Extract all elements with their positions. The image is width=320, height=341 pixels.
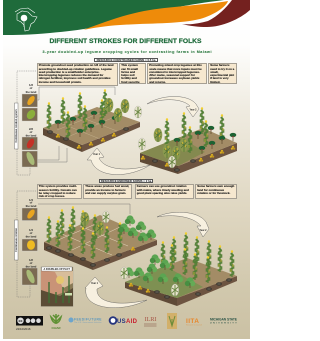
- crops: [165, 118, 169, 145]
- arrow: field 2 to field 1: Year 1: [93, 153, 101, 156]
- heading tag: resource constrained farms: RESOURCE CONSTRAINED FARMS < 0.5 ha: [97, 58, 155, 62]
- infographic artwork: [3, 0, 250, 339]
- vertical label: top: [14, 103, 18, 149]
- logo: creative commons: [16, 316, 43, 326]
- field 1: resource constrained year 1: [43, 89, 142, 152]
- dashed connector: lower rotation: [17, 191, 36, 297]
- land fraction labels: 1/4: [29, 198, 33, 202]
- land fraction labels: of: [30, 261, 32, 265]
- subtitle: 3-year doubled-up legume cropping cycles for contrasting farms in Malawi: [42, 50, 212, 54]
- land fraction labels: 1/2: [29, 258, 33, 262]
- logo: CGIAR: [51, 314, 61, 330]
- logo: ILRI: [144, 316, 156, 327]
- logo: USAID: USAID: [117, 319, 138, 325]
- land fraction labels: of: [30, 86, 32, 90]
- land fraction labels: the land: [26, 234, 37, 238]
- logo: Michigan State University: [210, 318, 238, 324]
- text box: endowed 3: Farmers can use groundnut rotation with maize, where timely weeding and good plant spacing also raise yields.: [137, 184, 189, 195]
- logo: IITA: Research to nourish: [186, 324, 202, 326]
- crop tile: yellow legume lower: [22, 239, 38, 251]
- text box: constrained 2: This system can fit small farms and helps soil fertility and food security.: [121, 63, 140, 84]
- logo: IITA: [186, 318, 202, 326]
- land fraction labels: 1/3: [29, 83, 33, 87]
- text box: endowed 4: Some farmers own enough land for continuous rotation or for livestock.: [197, 184, 234, 195]
- vertical label: top: Continuous rotation system: [15, 109, 18, 143]
- crops: [47, 216, 51, 243]
- arrow: field 2 to field 1: [87, 148, 150, 175]
- connector lines from crop tiles to fields: [37, 87, 130, 214]
- date: 22/10/2016: [16, 327, 31, 331]
- roots: [141, 156, 145, 160]
- arrow: field 3 to field 4: [157, 212, 209, 237]
- crop tile: maize lower: [22, 268, 38, 285]
- roots: [129, 283, 133, 287]
- crop tile: soybean top: [22, 108, 38, 121]
- land fraction labels: [26, 83, 37, 268]
- dashed connector: top rotation: [17, 71, 36, 175]
- text box: constrained 1: Promote groundnut seed production on 1/3 of the land according to doubled-up rotation guidelines. Legume seed production is a smallholder enterprise. Intercropping legumes reduces the demand for nitrogen fertilizer, improves soil health and provides income and household protein.: [39, 63, 114, 84]
- arrow: field 1 to field 2: Year 2: [189, 108, 197, 112]
- text box: constrained 2: [119, 62, 146, 84]
- field 2: resource constrained year 2: [138, 107, 237, 174]
- crops: [161, 241, 165, 268]
- logo: Feed the Future: The U.S. Government Initiative: [74, 321, 102, 324]
- text box: endowed 3: [134, 184, 194, 198]
- crop tile: maize top: [22, 151, 38, 167]
- logo: Michigan State University: MICHIGAN STATE: [210, 318, 238, 322]
- text box: endowed 1: This system provides multi-season fertility. Cereals can be relay cropped to reduce risk of crop losses.: [39, 184, 77, 198]
- text box: endowed 2: These areas produce fuel wood, provide an income to farmers and can supply surplus grain.: [85, 184, 129, 195]
- arrow: field 1 to field 2: [147, 96, 199, 117]
- logo: creative commons: cc: [19, 319, 22, 323]
- land fraction labels: of: [30, 130, 32, 134]
- land fraction labels: the land: [26, 90, 37, 94]
- title: DIFFERENT STROKES FOR DIFFERENT FOLKS: [50, 38, 202, 45]
- vertical label: lower: [14, 220, 18, 260]
- land fraction labels: 1/4: [29, 228, 33, 232]
- text box: constrained 4: Some farmers need to try it on a small, experimental plot if land is very limited.: [210, 63, 234, 84]
- field 3: resource endowed year 1: [44, 206, 157, 270]
- text box: endowed 4: [195, 184, 237, 198]
- header banner: [3, 0, 250, 35]
- arrow: field 4 to field 3: Year 1: [91, 282, 99, 285]
- logo: IITA: IITA: [186, 318, 199, 325]
- logo: ILRI: ILRI: [144, 316, 156, 323]
- crop tile: groundnut top: [22, 94, 38, 107]
- roots: [47, 130, 53, 134]
- vertical label: lower: Continuous rotation: [15, 228, 18, 252]
- land fraction labels: of: [30, 231, 32, 235]
- roots: [46, 246, 52, 250]
- logo: Michigan State University: UNIVERSITY: [210, 322, 237, 324]
- land fraction labels: the land: [26, 204, 37, 208]
- land fraction labels: the land: [26, 134, 37, 138]
- logo: Feed the Future: [68, 318, 102, 324]
- land fraction labels: the land: [26, 264, 37, 268]
- logo: CGIAR: CGIAR: [51, 326, 61, 330]
- text box: constrained 3: Promoting mixed crop legumes at this scale means that more inputs must be considered in intercropped legumes. After maize, seasonal support for groundnut increases soybean yields and returns.: [149, 63, 202, 84]
- logo: USAID: [109, 316, 138, 325]
- heading tag: resource endowed farms: RESOURCE ENDOWED FARMS > 2 ha: [101, 178, 151, 182]
- logo: Bunda college: [167, 313, 177, 329]
- field 4: resource endowed year 2: [120, 232, 237, 306]
- arrow: field 4 to field 3: [85, 277, 147, 308]
- text box: endowed 2: [83, 184, 132, 198]
- inset photo: A DOUBLED-UP PLOT: [44, 268, 70, 271]
- land fraction labels: 2/3: [29, 127, 33, 131]
- arrow: field 3 to field 4: Year 2: [199, 229, 207, 232]
- crop tile: groundnut lower: [22, 208, 38, 220]
- logo: Africa RISING: [15, 8, 37, 31]
- inset photo: [41, 267, 73, 306]
- crop tile: chilli top: [22, 137, 38, 150]
- crops: [47, 102, 51, 129]
- land fraction labels: of: [30, 200, 32, 204]
- poster background: [3, 0, 250, 339]
- logo: Feed the Future: FEEDIFUTURE: [74, 318, 102, 322]
